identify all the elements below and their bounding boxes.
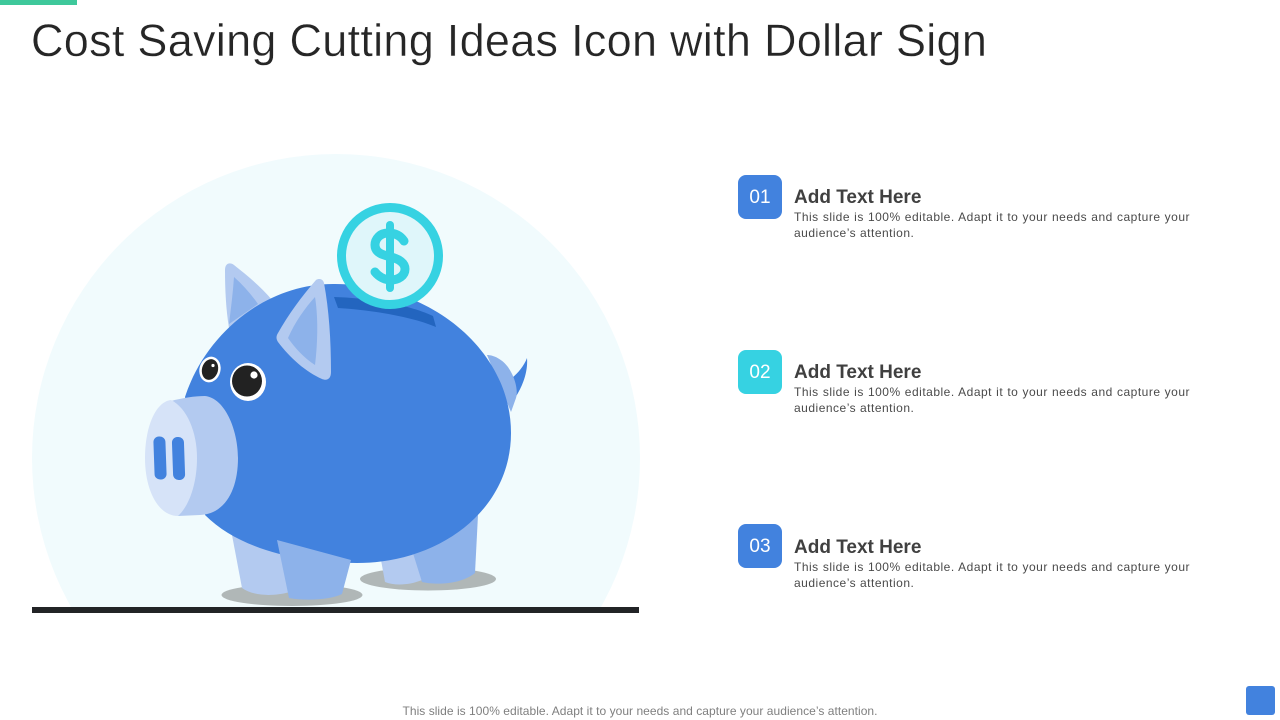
tail <box>487 355 527 412</box>
item 02 badge <box>738 350 782 394</box>
title: Cost Saving Cutting Ideas Icon with Dollar Sign <box>31 15 987 66</box>
item 03 text: This slide is 100% editable. Adapt it to your needs and capture your audience’s attention. <box>794 560 1190 590</box>
snout <box>145 396 238 516</box>
front left leg <box>277 540 351 600</box>
body <box>185 284 511 563</box>
background circle <box>32 154 640 607</box>
footer note: This slide is 100% editable. Adapt it to your needs and capture your audience’s attention. <box>402 704 878 718</box>
item 01 badge: 01 <box>749 187 771 208</box>
item 01 badge <box>738 175 782 219</box>
item 03 badge: 03 <box>749 536 771 557</box>
nostrils <box>153 436 185 480</box>
item 01 text: This slide is 100% editable. Adapt it to your needs and capture your audience’s attention. <box>794 210 1190 240</box>
ground shadows <box>222 568 496 606</box>
front ear <box>276 279 331 380</box>
front right leg <box>412 515 478 584</box>
back ear <box>225 263 272 328</box>
illustration: piggy bank <box>32 154 640 613</box>
item 02 text: Add Text Here <box>794 362 921 383</box>
top accent bar <box>0 0 77 5</box>
ground line <box>32 607 639 613</box>
corner square <box>1246 686 1275 715</box>
item 03 badge <box>738 524 782 568</box>
dollar sign <box>375 225 405 288</box>
coin slot <box>334 297 436 327</box>
eye: far <box>196 354 224 385</box>
item 02 text <box>794 362 1190 415</box>
item 03 text <box>794 537 1190 590</box>
item 01 text: Add Text Here <box>794 187 921 208</box>
item 02 badge: 02 <box>749 362 771 383</box>
item 01 text <box>794 187 1190 240</box>
coin <box>342 208 438 304</box>
item 02 text: This slide is 100% editable. Adapt it to your needs and capture your audience’s attention. <box>794 385 1190 415</box>
back legs <box>232 535 422 595</box>
eye: near <box>230 363 266 401</box>
item 03 text: Add Text Here <box>794 537 921 558</box>
